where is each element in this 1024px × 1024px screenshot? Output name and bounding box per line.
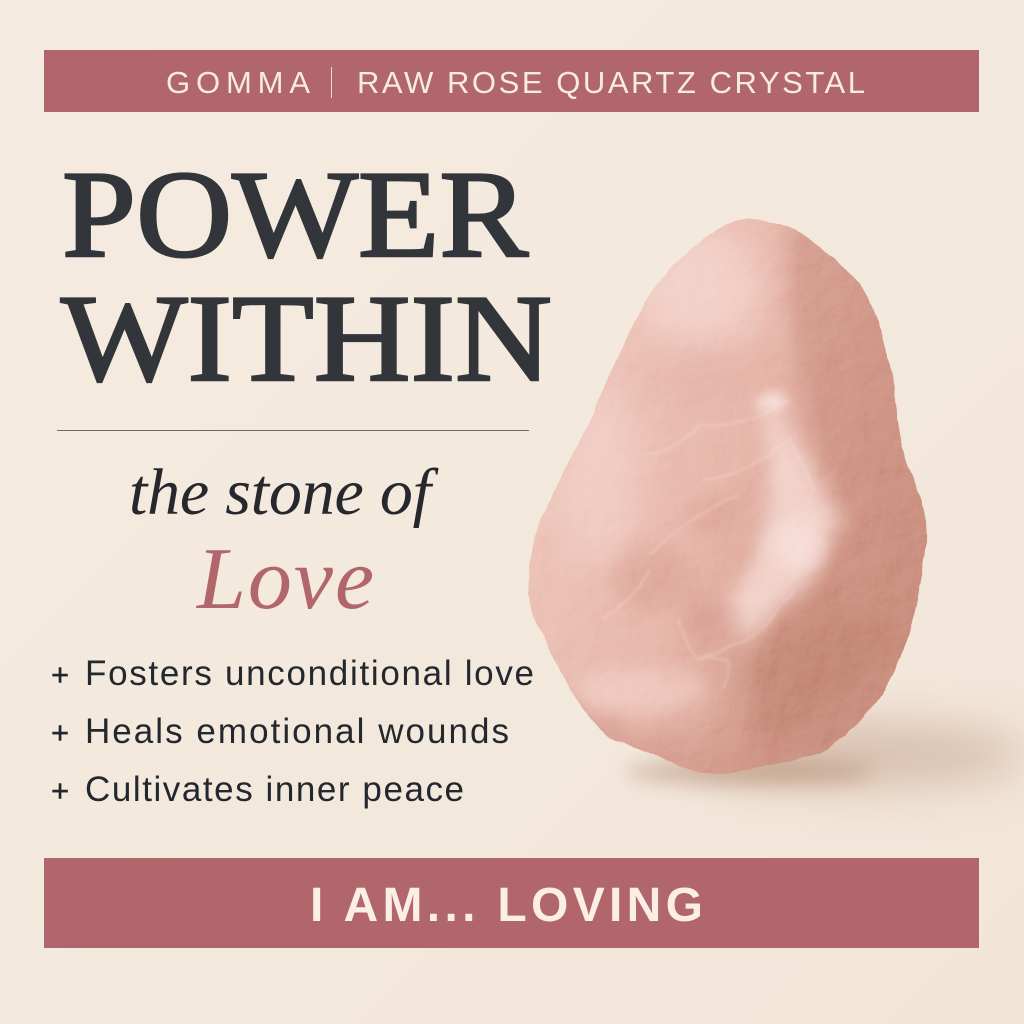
central hollows (611, 546, 695, 610)
top banner: GOMMA (166, 65, 310, 100)
stone shadow (625, 725, 1024, 785)
rose quartz stone (515, 210, 940, 790)
bottom banner: I AM... LOVING (310, 879, 703, 932)
title: WITHIN (61, 269, 552, 407)
centre pale ridge (720, 395, 840, 640)
benefits list (51, 654, 534, 809)
fracture ridges (603, 416, 792, 688)
subtitle (129, 456, 439, 628)
title: POWER (62, 145, 528, 283)
benefit: inner peace: Cultivates inner peace (85, 770, 464, 809)
benefit: unconditional love: Fosters unconditional love (85, 654, 534, 693)
top banner (44, 50, 979, 112)
bottom banner (44, 858, 979, 948)
shaded right face (781, 226, 894, 492)
divider (57, 430, 529, 431)
subtitle: Love (195, 531, 374, 628)
title (61, 145, 552, 407)
benefit: emotional wounds: + (51, 715, 69, 750)
lower right warm shade (749, 620, 881, 729)
bottom edge shade (573, 674, 888, 773)
benefit: emotional wounds: Heals emotional wounds (85, 712, 509, 751)
surface texture (539, 224, 927, 774)
benefit: inner peace: + (51, 773, 69, 808)
benefit: unconditional love: + (51, 657, 69, 692)
top banner: RAW ROSE QUARTZ CRYSTAL (357, 65, 865, 100)
subtitle: the stone of (129, 456, 439, 529)
upper left light (638, 228, 762, 352)
